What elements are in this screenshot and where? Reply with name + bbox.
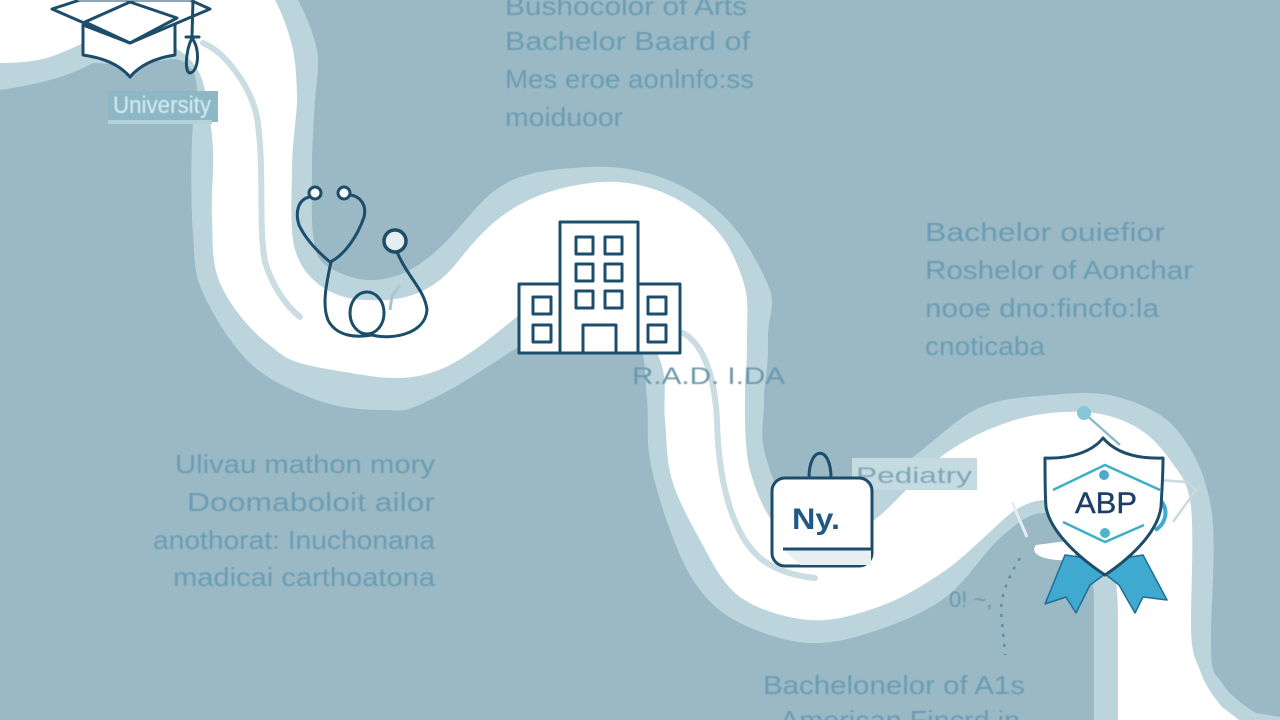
text block: right degrees: cnoticaba [925,331,1046,361]
text block: lower left certification: Ulivau mathon mory [175,449,435,479]
text block: top degrees: Mes eroe aonlnfo:ss [505,64,754,94]
text block: right degrees: Roshelor of Aonchar [925,255,1193,285]
icon: ABP badge [1045,438,1167,613]
text block: lower left certification: madicai carthoatona [173,562,436,592]
text block: bottom: Bachelonelor of A1s [763,670,1025,700]
label: residency: R.A.D. I.DA [632,363,785,390]
icon: stethoscope [297,187,427,337]
icon: medical bag [772,453,872,566]
label: pediatry: Pediatry [856,463,972,488]
dotted connector [1001,558,1020,655]
icon: certification wires [1012,413,1196,560]
text block: right degrees: nooe dno:fincfo:la [925,293,1160,323]
icon: certification pin [1077,406,1091,420]
label: pediatry [852,458,977,490]
icon: ABP badge: ABP [1075,487,1137,520]
text block: lower left certification: anothorat: Inuchonana [153,525,436,555]
text block: lower left certification [153,449,436,592]
icon: hospital [519,222,680,353]
text block: right degrees: Bachelor ouiefior [925,217,1165,247]
icon: graduation cap [52,0,210,77]
label: small note: 0! ~, [949,587,992,612]
text block: top degrees: moiduoor [505,102,623,132]
label: university: University [113,92,211,119]
text block: top degrees [505,0,754,132]
text block: right degrees [925,217,1193,361]
icon: medical bag: Ny. [792,503,840,536]
text block: lower left certification: Doomaboloit ailor [187,487,435,517]
text block: bottom [763,670,1025,720]
text block: top degrees: Bachelor Baard of [505,26,751,56]
